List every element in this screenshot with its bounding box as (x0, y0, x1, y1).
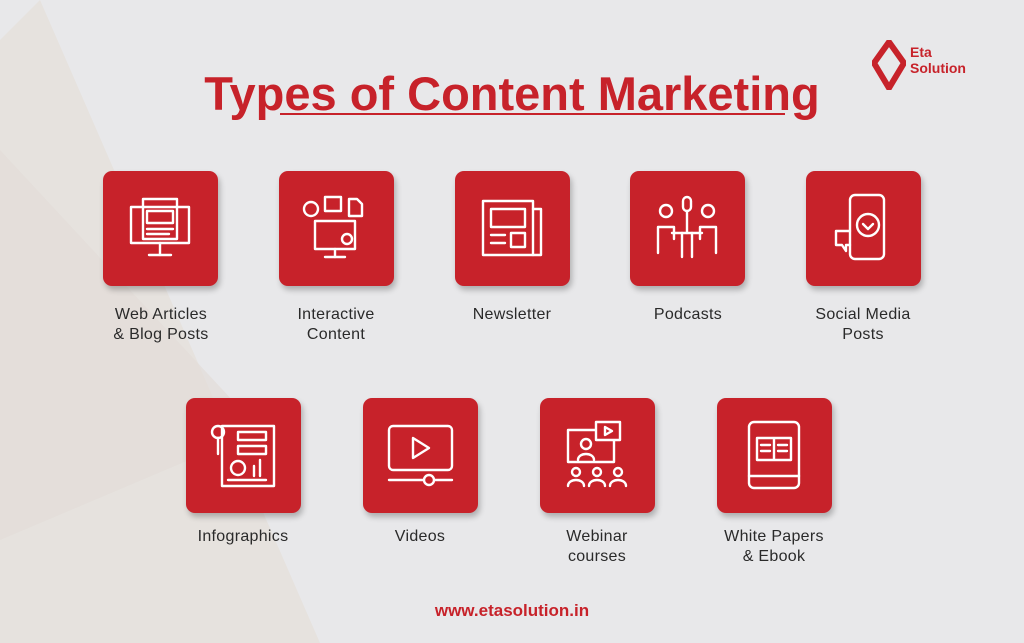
text: & Ebook (743, 548, 805, 565)
card: webinar (539, 398, 660, 565)
text: Newsletter (473, 306, 551, 323)
title: Types of Content Marketing (204, 67, 820, 120)
card: web articles (102, 171, 223, 343)
card: videos (362, 398, 483, 545)
card: interactive (278, 171, 399, 343)
logo: Eta (910, 44, 932, 60)
footer url: www.etasolution.in (435, 601, 589, 620)
text: Web Articles (115, 306, 207, 323)
card: infographics (185, 398, 306, 545)
logo: Solution (910, 60, 966, 76)
card: social media (805, 171, 926, 343)
text: courses (568, 548, 626, 565)
card: white papers (716, 398, 837, 565)
text: Social Media (815, 306, 911, 323)
card: newsletter (454, 171, 575, 323)
text: Infographics (198, 528, 288, 545)
text: White Papers (724, 528, 824, 545)
text: Webinar (566, 528, 628, 545)
text: Podcasts (654, 306, 722, 323)
card: podcasts (629, 171, 750, 323)
text: & Blog Posts (113, 326, 209, 343)
text: Videos (395, 528, 445, 545)
text: Content (307, 326, 365, 343)
text: Interactive (297, 306, 375, 323)
logo (872, 40, 966, 90)
text: Posts (842, 326, 884, 343)
